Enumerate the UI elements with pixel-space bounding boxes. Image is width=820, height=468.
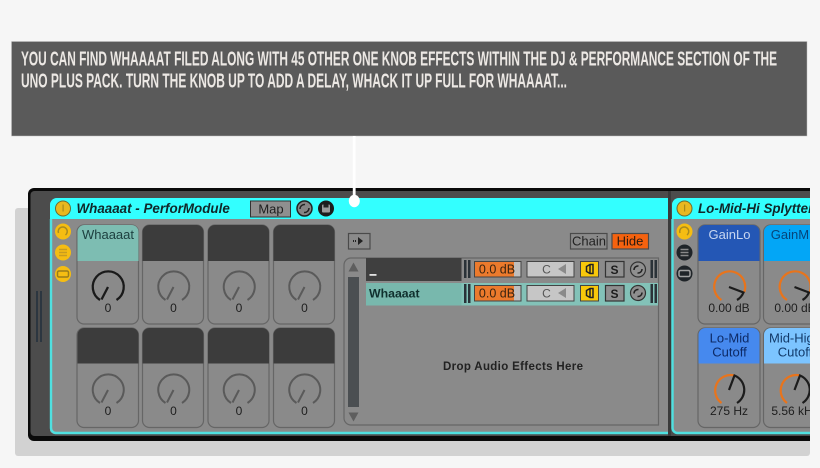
knob values [708,304,810,415]
knob labels: Mid-High [769,330,820,346]
knob labels: GainLo [709,227,750,242]
hide button: Hide [617,234,643,248]
map button: Map [258,202,284,216]
knob values: 275 Hz [710,404,748,418]
macro values: 0 [170,301,177,315]
knob labels [709,230,810,356]
arrow toggle button [348,234,370,249]
knob values: 0.00 dB [774,301,816,315]
map button [250,201,290,217]
icon: power [677,201,692,216]
knob values: 0.00 dB [708,301,750,315]
knob cells [77,225,334,428]
macro label: Whaaaat [82,227,134,242]
macro values: 0 [105,301,112,315]
icon: power [56,201,70,216]
callout connector line [349,136,360,207]
chain row: Whaaaat: 0.0 dB [479,286,515,300]
chain row: Whaaaat: Whaaaat [369,286,420,300]
scroll bar [348,262,359,422]
knobs [714,271,811,403]
knob values: 5.56 kHz [771,404,819,418]
device title: Whaaaat - PerforModule [76,201,230,216]
chain button: Chain [572,234,606,248]
chain row: Whaaaat [366,283,658,306]
panel: device rack screenshot [15,188,820,456]
macro values: 0 [170,404,177,418]
macro values: 0 [301,301,308,315]
macro values: 0 [236,404,243,418]
chain row: empty: S [610,263,619,277]
icon: save [318,200,334,216]
icon: hot-swap [297,201,312,216]
chain row: Whaaaat: C [542,286,551,300]
macro knobs [93,271,320,403]
drop hint: Drop Audio Effects Here [443,361,583,373]
knob cells [698,225,820,428]
chain row: Whaaaat: S [610,287,619,301]
panel: chain list [344,258,658,425]
caption text [21,48,777,92]
knob labels: GainMid [771,227,819,242]
side icons [55,224,71,282]
rack handle [36,291,42,342]
macro values [105,301,308,418]
knob labels: Cutoff [778,344,813,360]
chain row: empty [366,258,657,281]
chain row: empty: C [542,262,551,276]
panel: Whaaaat device [50,191,671,436]
macro values: 0 [301,404,308,418]
macro values: 0 [236,301,243,315]
panel: Lo-Mid-Hi Splytter device [672,198,820,434]
chain row: empty: 0.0 dB [479,262,515,276]
macro values: 0 [105,404,112,418]
side icons [676,224,692,282]
knob labels: Cutoff [712,344,747,360]
knob labels: Lo-Mid [710,330,749,346]
device title: Lo-Mid-Hi Splytter [698,201,814,216]
panel: caption banner [12,42,807,136]
